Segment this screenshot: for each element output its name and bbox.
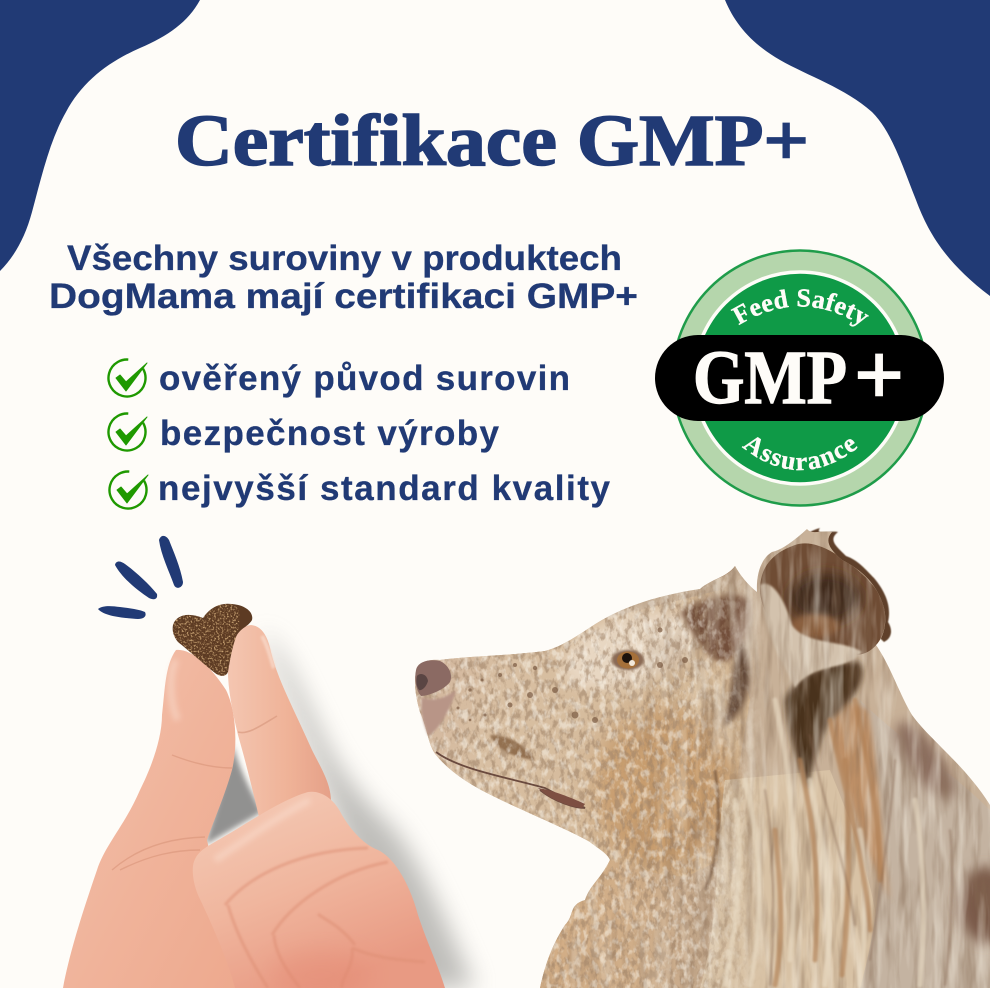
GMP+ logo badge	[655, 249, 944, 507]
cheek warm tone	[595, 705, 735, 875]
chest	[540, 860, 718, 988]
GMP+ logo badge: GMP	[693, 336, 847, 420]
intro text: Všechny suroviny v produktech	[67, 239, 622, 278]
face speckle texture	[415, 570, 752, 988]
thumb crease	[112, 755, 232, 870]
heart shaped treat	[172, 604, 252, 676]
muzzle and face	[410, 590, 750, 880]
title: Certifikace GMP+	[175, 100, 809, 181]
GMP+ logo badge: Assurance	[742, 437, 858, 470]
neck shading line	[705, 770, 718, 890]
muzzle speckle patch	[490, 735, 535, 760]
curled fingers fist	[193, 792, 445, 988]
intro text	[49, 239, 638, 316]
mouth line	[436, 752, 585, 808]
GMP+ logo badge: Feed Safety	[730, 289, 869, 327]
hand holding treat	[63, 625, 445, 988]
mane strand details	[725, 700, 952, 985]
decorative corner blob: top left	[0, 0, 200, 271]
nose line pink muzzle	[421, 690, 456, 735]
finger highlight	[171, 660, 310, 860]
ear dark centre	[789, 573, 861, 623]
muzzle freckles	[456, 628, 688, 723]
shade behind face	[722, 640, 749, 728]
check item: production safety	[102, 407, 500, 457]
mane fur texture	[540, 532, 990, 988]
eye	[612, 650, 644, 670]
fold on index finger	[238, 716, 277, 733]
finger tip nail highlight	[262, 636, 274, 668]
checklist	[102, 353, 611, 515]
finger shading	[225, 848, 425, 988]
check item: verified origin: ověřený původ surovin	[159, 359, 570, 398]
sparkle lines above treat	[98, 536, 183, 619]
check item: highest quality standard	[103, 465, 611, 515]
mane tan strands	[829, 702, 892, 896]
check item: highest quality standard: nejvyšší standard kvality	[158, 469, 611, 508]
thumb and palm	[63, 650, 240, 988]
ear warm centre	[791, 614, 839, 638]
mane light strands	[700, 770, 880, 988]
nostril	[416, 674, 428, 690]
index finger	[228, 625, 331, 830]
decorative corner blob: top right	[725, 0, 990, 296]
check item: verified origin	[102, 353, 570, 403]
dog	[400, 520, 990, 988]
GMP+ logo badge: +	[854, 327, 904, 424]
ear hair tufts	[762, 528, 891, 642]
ear inner	[760, 543, 886, 655]
ear pale fur	[760, 584, 862, 688]
lower fist warm tone	[270, 951, 370, 988]
mouth opening	[538, 788, 585, 808]
dark mane under ear	[785, 662, 862, 790]
brown forehead patch	[680, 596, 750, 661]
dark patch at back	[959, 867, 990, 943]
nose	[415, 660, 451, 696]
right body mottled	[860, 700, 990, 988]
head tuft above forehead	[700, 566, 760, 605]
forehead light blaze	[560, 606, 696, 694]
intro text: DogMama mají certifikaci GMP+	[49, 277, 638, 316]
dog body base	[415, 529, 990, 988]
check item: production safety: bezpečnost výroby	[160, 414, 500, 453]
hand shadow	[205, 630, 475, 988]
